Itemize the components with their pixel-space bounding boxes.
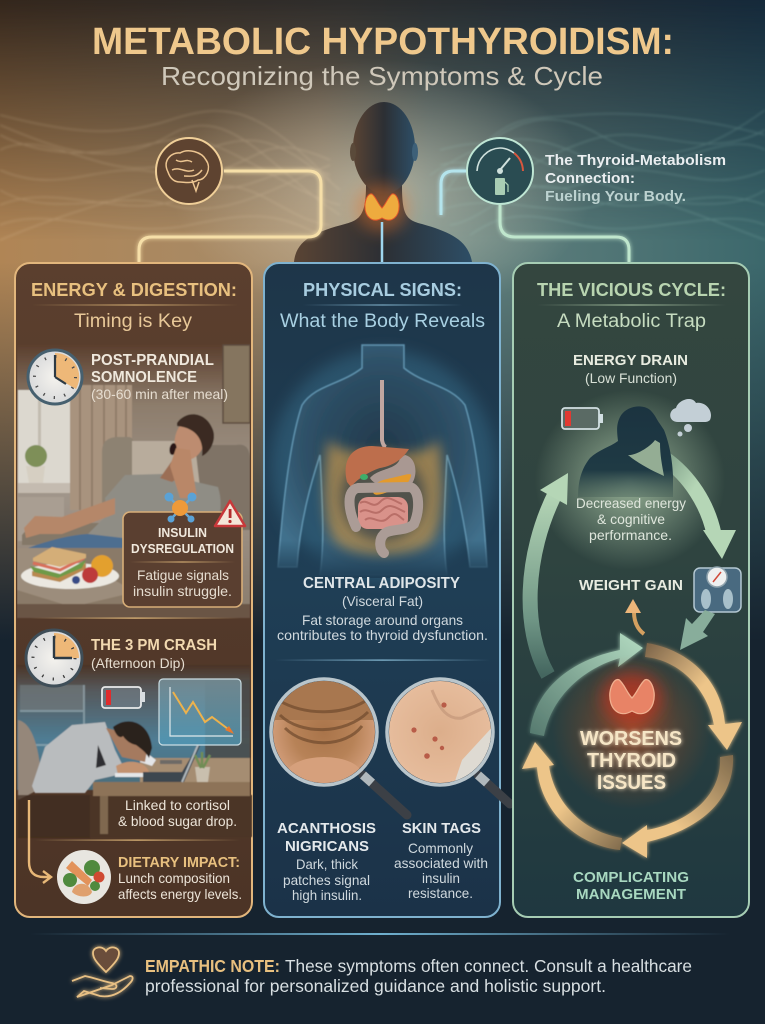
glow behind silhouette <box>535 390 725 570</box>
text: energy drain: (Low Function) <box>585 370 677 386</box>
text: central adiposity: Fat storage around organs <box>302 612 463 628</box>
scene: yawning man in armchair <box>17 345 250 618</box>
text: decreased energy <box>576 495 686 543</box>
icon: insulin molecule <box>164 492 196 522</box>
connector: gauge to body <box>441 171 468 215</box>
text: decreased energy: performance. <box>589 527 672 543</box>
text: decreased energy: Decreased energy <box>576 495 686 511</box>
heading: vicious cycle: THE VICIOUS CYCLE: <box>537 280 726 300</box>
text: acanthosis nigricans: Dark, thick <box>296 856 359 872</box>
central figure with glowing thyroid <box>294 102 472 262</box>
text: worsens thyroid issues: THYROID <box>587 750 676 772</box>
icon: clock, 3 pm <box>26 630 82 686</box>
ring segment: upper right <box>645 643 742 750</box>
magnifier: acanthosis nigricans <box>270 679 407 815</box>
empathic note: These symptoms often connect. Consult a healthcare <box>285 956 692 976</box>
icon: fuel gauge <box>467 138 533 204</box>
text: worsens thyroid issues: WORSENS <box>580 728 682 750</box>
text: complicating management <box>573 869 689 903</box>
text: post-prandial somnolence: SOMNOLENCE <box>91 369 197 386</box>
text: acanthosis nigricans: ACANTHOSIS <box>277 820 376 837</box>
icon: clock, after meal <box>28 350 82 404</box>
connection caption: The Thyroid-Metabolism <box>545 152 726 169</box>
text: energy drain <box>573 352 688 386</box>
text: post-prandial somnolence: (30-60 min after meal) <box>91 386 228 402</box>
icon: healthy plate <box>57 850 111 904</box>
ring segment: lower right <box>622 755 733 858</box>
text: cortisol link <box>118 797 237 829</box>
text: dietary impact <box>118 855 242 902</box>
scene: man asleep at desk <box>17 665 252 838</box>
icon: thought cloud <box>670 399 711 436</box>
text: the 3 pm crash: THE 3 PM CRASH <box>91 637 217 654</box>
text: dietary impact: Lunch composition <box>118 870 230 886</box>
callout: insulin dysregulation: DYSREGULATION <box>131 541 234 556</box>
jeans <box>28 534 122 548</box>
text: acanthosis nigricans: patches signal <box>283 872 370 888</box>
neck <box>160 462 175 482</box>
raised forearm and hand <box>170 448 197 498</box>
connector: brain to left panel <box>139 171 321 263</box>
text: post-prandial somnolence <box>91 352 228 402</box>
icon: inflamed thyroid <box>602 672 662 724</box>
face and hair <box>174 426 203 459</box>
panel: vicious cycle <box>513 263 749 917</box>
heading: energy and digestion: ENERGY & DIGESTION: <box>31 280 237 300</box>
icon: depleted figure <box>578 406 673 497</box>
text: acanthosis nigricans <box>277 820 376 903</box>
connection caption: Connection: <box>545 170 635 187</box>
shirt <box>32 722 125 793</box>
empathic note: professional for personalized guidance and holistic support. <box>145 976 606 996</box>
sandwich <box>32 563 86 582</box>
text: central adiposity: (Visceral Fat) <box>342 593 423 609</box>
text: the 3 pm crash: (Afternoon Dip) <box>91 655 185 671</box>
text: worsens thyroid issues <box>580 728 682 794</box>
callout: insulin dysregulation: insulin struggle. <box>133 583 232 599</box>
callout: insulin dysregulation <box>123 492 245 607</box>
energy waves: left <box>0 111 340 240</box>
icon: hand holding heart <box>72 947 133 997</box>
text: complicating management: COMPLICATING <box>573 869 689 886</box>
text: cortisol link: Linked to cortisol <box>125 797 230 813</box>
text: skin tags: resistance. <box>408 885 473 901</box>
text: central adiposity <box>277 575 488 643</box>
ring segment: green <box>530 633 643 736</box>
connector: gauge to right panel <box>500 205 629 263</box>
arrow: scale to ring <box>680 610 715 650</box>
laptop and papers <box>115 773 149 777</box>
subheading: timing is key: Timing is Key <box>74 311 193 332</box>
title: METABOLIC HYPOTHYROIDISM: <box>92 21 674 63</box>
connection caption <box>545 152 726 205</box>
arrow: crash to diet <box>29 800 51 883</box>
empathic note: EMPATHIC NOTE: <box>145 956 280 976</box>
cycle ring <box>522 633 742 858</box>
ring segment: lower left <box>522 742 622 850</box>
text: skin tags: SKIN TAGS <box>402 820 481 837</box>
text: acanthosis nigricans: high insulin. <box>292 887 362 903</box>
icon: low battery <box>562 408 603 429</box>
callout: insulin dysregulation: Fatigue signals <box>137 567 229 583</box>
arrow: cycle back to energy drain <box>530 473 568 675</box>
arrow: energy drain to weight gain <box>664 458 736 559</box>
arrow: weight gain to worsens <box>625 599 644 634</box>
text: complicating management: MANAGEMENT <box>576 886 686 903</box>
text: central adiposity: contributes to thyroid dysfunction. <box>277 627 488 643</box>
text: central adiposity: CENTRAL ADIPOSITY <box>303 575 461 592</box>
panel: energy and digestion <box>15 263 252 917</box>
text: the 3 pm crash <box>91 637 217 671</box>
text: skin tags: associated with <box>394 855 488 871</box>
callout: insulin dysregulation: INSULIN <box>158 525 207 540</box>
text: decreased energy: & cognitive <box>597 511 665 527</box>
head <box>106 728 148 762</box>
subtitle: Recognizing the Symptoms & Cycle <box>161 61 603 91</box>
shirt <box>88 474 221 538</box>
connection caption: Fueling Your Body. <box>545 188 686 205</box>
chart: falling blood sugar line <box>159 679 241 745</box>
subheading: a metabolic trap: A Metabolic Trap <box>557 311 706 332</box>
icon: bathroom scale <box>694 567 741 612</box>
text: acanthosis nigricans: NIGRICANS <box>285 838 369 855</box>
icon: brain <box>156 138 222 204</box>
arm <box>24 498 115 538</box>
heading: physical signs: PHYSICAL SIGNS: <box>303 280 462 300</box>
background <box>0 0 765 620</box>
empathic note <box>145 956 692 996</box>
subheading: what the body reveals: What the Body Reveals <box>280 311 485 332</box>
icon: warning triangle <box>215 501 245 526</box>
text: skin tags: Commonly <box>408 840 473 856</box>
panel: physical signs <box>264 263 510 917</box>
energy waves: right <box>430 110 765 240</box>
text: cortisol link: & blood sugar drop. <box>118 813 237 829</box>
text: dietary impact: affects energy levels. <box>118 886 242 902</box>
text: worsens thyroid issues: ISSUES <box>597 772 666 794</box>
text: post-prandial somnolence: POST-PRANDIAL <box>91 352 214 369</box>
armchair <box>102 437 134 505</box>
text: energy drain: ENERGY DRAIN <box>573 352 688 369</box>
glow behind thyroid text <box>552 650 712 810</box>
magnifier: skin tags <box>387 679 510 804</box>
text: weight gain: WEIGHT GAIN <box>579 577 683 594</box>
desk surface <box>140 758 250 782</box>
table <box>18 548 122 604</box>
illustration: torso with visceral fat and organs <box>270 345 495 580</box>
text: dietary impact: DIETARY IMPACT: <box>118 855 240 871</box>
text: skin tags: insulin <box>422 870 460 886</box>
text: skin tags <box>394 820 488 901</box>
icon: low battery <box>102 687 145 708</box>
